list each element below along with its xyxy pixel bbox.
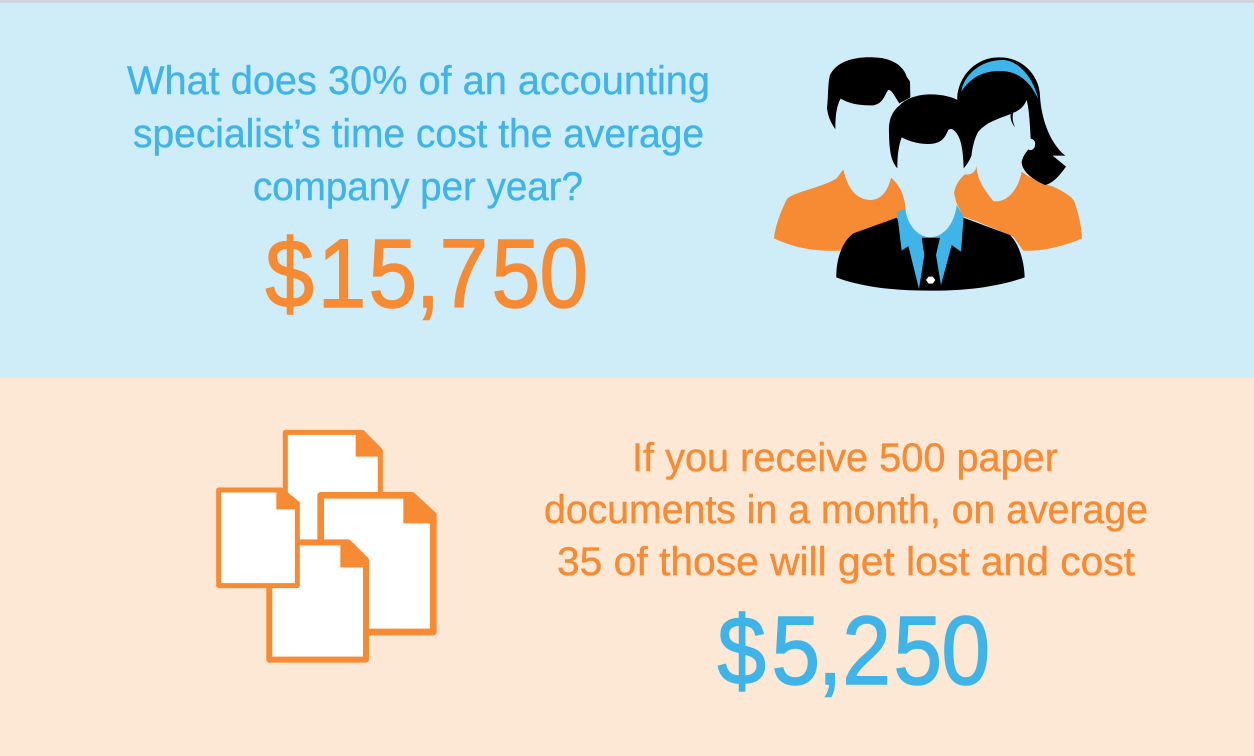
right person body (954, 166, 1082, 251)
icon: three business people (774, 57, 1082, 291)
document: bottom (269, 542, 366, 660)
question text: accounting specialist cost: What does 30% of an accounting (127, 59, 710, 103)
question text: lost paper documents: 35 of those will get lost and cost (557, 540, 1135, 584)
question text: lost paper documents: documents in a month, on average (544, 488, 1148, 532)
question text: accounting specialist cost: specialist’s time cost the average (133, 112, 704, 156)
icon: stack of paper documents (219, 432, 433, 660)
big number: $15,750: $15,750 (265, 219, 588, 328)
question text: accounting specialist cost (127, 59, 710, 209)
left person body (774, 169, 906, 251)
document: left (219, 490, 297, 586)
panel: bottom peach background (0, 378, 1254, 756)
left person hair (827, 57, 910, 129)
centre person shirt collar (897, 205, 964, 289)
document: back top (285, 432, 380, 553)
question text: lost paper documents: If you receive 500 paper (632, 436, 1058, 480)
right and centre person hair (889, 57, 1066, 185)
headband (961, 60, 1038, 99)
question text: accounting specialist cost: company per year? (253, 165, 583, 209)
tie pin (926, 277, 935, 284)
big number: $5,250: $5,250 (717, 596, 990, 705)
panel: top blue background (0, 0, 1254, 378)
question text: lost paper documents (544, 436, 1148, 584)
centre person suit (836, 218, 1025, 291)
document: right (321, 495, 433, 632)
